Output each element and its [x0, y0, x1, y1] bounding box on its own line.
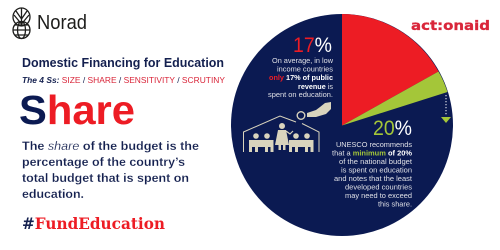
description: 17%: On average, in low	[272, 56, 334, 65]
body text: percentage of the country’s	[22, 155, 185, 169]
icon: students left	[249, 133, 274, 152]
description: 20%: and notes that the least	[334, 174, 412, 183]
pie chart	[231, 14, 453, 236]
description: 20%: is spent on education	[341, 166, 412, 174]
figure: 20%: 20%	[373, 117, 412, 140]
description: 17%	[268, 56, 334, 99]
icon: students right	[289, 133, 314, 152]
icon: hand giving coin to classroom	[244, 102, 331, 152]
pie base: remaining budget	[231, 14, 453, 236]
body text: total budget that is spent on	[22, 171, 189, 185]
description: 20%: UNESCO recommends	[336, 140, 412, 149]
title: Share: Share	[19, 87, 135, 133]
description: 20%: may need to exceed	[345, 191, 412, 200]
icon: classroom roof	[244, 116, 319, 152]
slice: 17% red	[342, 14, 438, 126]
Norad wordmark: Norad	[37, 12, 87, 34]
body text: education.	[22, 187, 84, 201]
body text: The share of the budget is the	[22, 139, 199, 153]
callout: 17%	[268, 34, 334, 99]
description: 20%: developed countries	[345, 182, 412, 192]
icon: hand and coin	[297, 102, 331, 119]
icon: teacher	[275, 123, 293, 150]
logo: actionaid: act:onaid	[411, 18, 490, 34]
body text	[22, 139, 199, 201]
description: 17%: only 17% of public	[269, 73, 333, 82]
description: 20%: of the national budget	[339, 157, 412, 166]
description: 17%: spent on education.	[268, 90, 333, 99]
slice: 3% green	[342, 72, 448, 126]
description: 17%: revenue is	[298, 82, 333, 91]
hashtag: #FundEducation	[22, 214, 165, 233]
subheading: the 4 Ss: The 4 Ss: SIZE / SHARE / SENSITIVITY / SCRUTINY	[22, 75, 225, 85]
callout: 20%	[332, 117, 413, 208]
description: 20%: that a minimum of 20%	[332, 148, 413, 158]
icon: Norad globe logo	[13, 8, 30, 38]
figure: 17%: 17%	[293, 34, 332, 57]
heading: Domestic Financing for Education	[22, 56, 224, 70]
arrow: dotted pointer to 20%	[441, 95, 451, 123]
description: 20%	[332, 140, 413, 208]
description: 20%: this share.	[378, 200, 412, 208]
description: 17%: income countries	[277, 64, 333, 74]
